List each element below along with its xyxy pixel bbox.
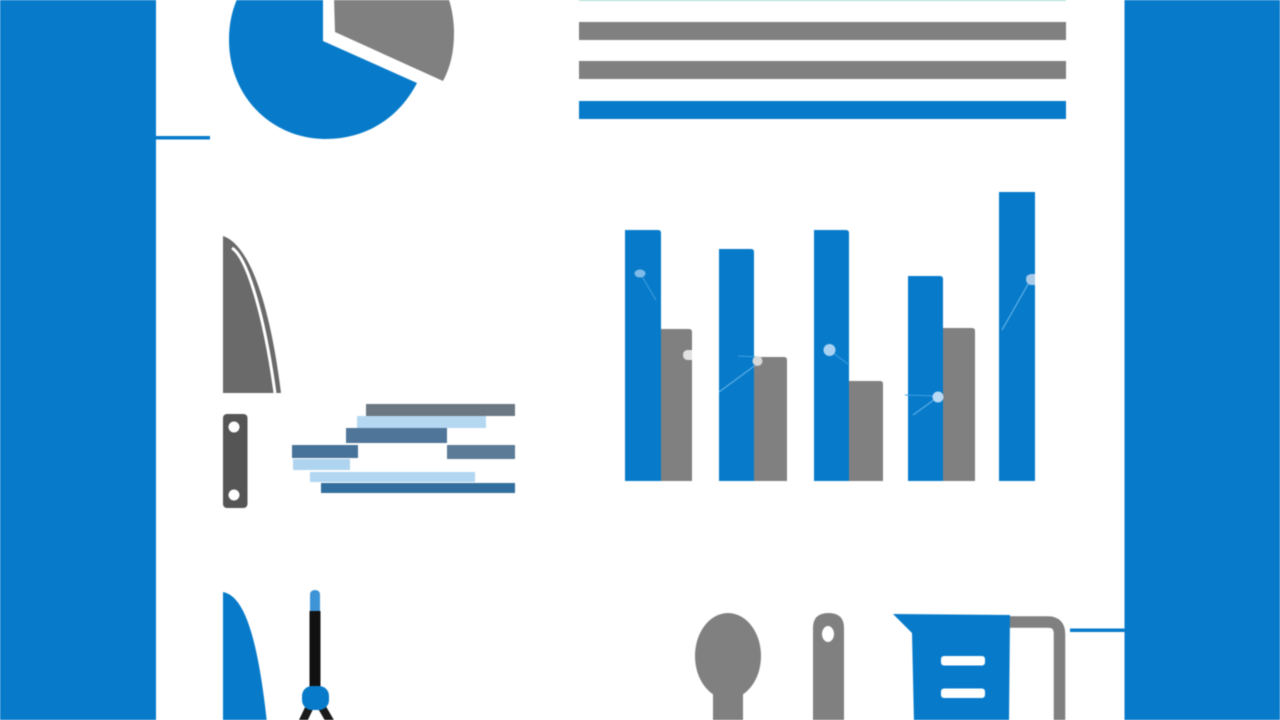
icon: grey spoon [695, 613, 761, 720]
panel: left blue side band [0, 0, 156, 720]
connector line: left band [156, 136, 210, 140]
icon: measuring cup [893, 614, 1060, 720]
handle rivet top [228, 422, 240, 432]
group 1 [625, 230, 692, 481]
knife blade [223, 236, 281, 393]
trend line data points [634, 270, 1035, 402]
striped blue bars graphic [292, 404, 515, 493]
group 2 [719, 249, 787, 481]
compass tip [310, 590, 320, 611]
group 4 [908, 276, 975, 481]
pie slice: grey [334, 0, 454, 81]
icon: blue knife blade [223, 592, 267, 720]
grey bar 1 [579, 22, 1066, 40]
top edge bar [579, 0, 1066, 1]
grey bar 2 [579, 61, 1066, 79]
icon: grey spatula handle [813, 613, 844, 720]
trend line segments [640, 273, 1031, 415]
pie chart [229, 0, 454, 139]
connector line: right band [1070, 628, 1125, 632]
compass shaft [310, 611, 320, 689]
icon: compass tool [302, 590, 331, 720]
cup body [893, 614, 1010, 720]
compass legs [302, 704, 331, 720]
grouped bar chart [625, 192, 1035, 481]
horizontal bar chart [579, 0, 1066, 119]
handle rivet bottom [228, 490, 240, 500]
cup mark top [941, 656, 985, 666]
group 5 [999, 192, 1035, 481]
blue bar [579, 101, 1066, 119]
panel: right blue side band [1124, 0, 1280, 720]
compass hinge [302, 686, 329, 710]
icon: grey chef knife [223, 236, 281, 508]
cup handle [1009, 622, 1060, 720]
blade edge highlight [232, 248, 275, 393]
group 3 [814, 230, 883, 481]
cup mark bottom [941, 688, 985, 698]
knife handle [223, 414, 248, 508]
pie slice: blue [229, 0, 417, 139]
